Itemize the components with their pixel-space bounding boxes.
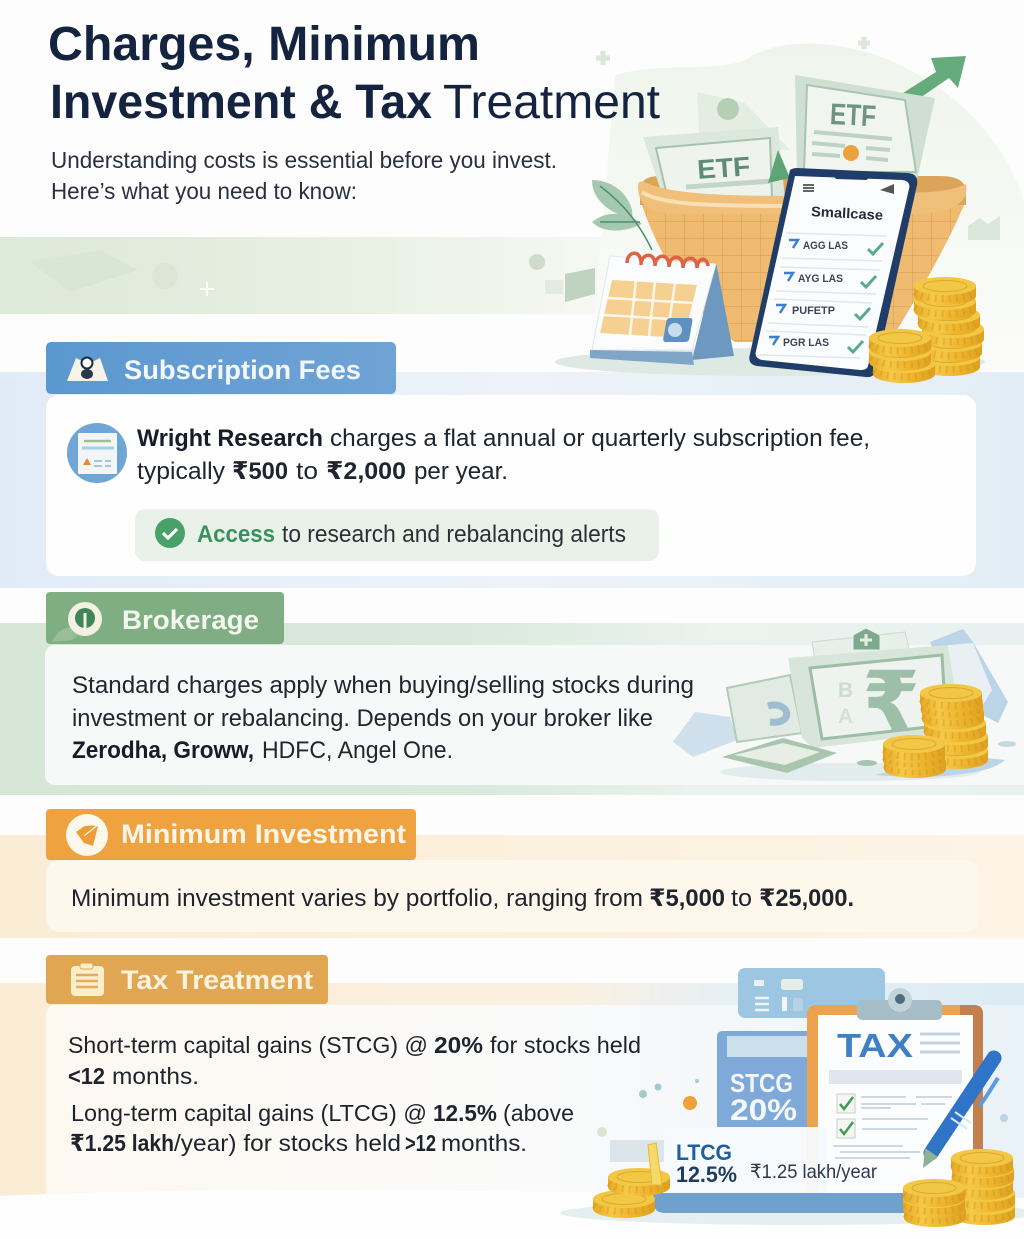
brokerage illustration: cash and coins	[673, 628, 1016, 781]
panel: tax treatment	[0, 1005, 1024, 1239]
text: brokerage description: HDFC, Angel One.	[262, 737, 453, 764]
icon: phone: AYG LAS	[798, 273, 843, 285]
LTCG card: LTCG	[676, 1140, 732, 1165]
callout: access: to research and rebalancing alerts	[282, 521, 626, 548]
icon: hero coin stacks	[869, 277, 984, 383]
band: brokerage section background	[0, 623, 1024, 795]
icon: tax coin stacks	[593, 1143, 1015, 1227]
text: tax description: ₹1.25 lakh	[70, 1130, 174, 1156]
icon: clipboard	[807, 988, 983, 1197]
text: tax description: (above	[503, 1100, 574, 1126]
text: tax description: /year) for stocks held	[174, 1130, 401, 1156]
icon: phone: Smallcase	[811, 203, 884, 223]
text: brokerage description: Zerodha, Groww,	[72, 737, 254, 764]
callout: access	[135, 509, 659, 561]
icon: phone: AGG LAS	[803, 240, 848, 252]
header: subscription fees	[46, 342, 396, 394]
icon: subscription badge	[67, 358, 108, 381]
title: Treatment	[443, 76, 660, 129]
icon: growth arrow	[903, 56, 966, 102]
icon: phone	[749, 168, 917, 377]
text: tax description: 20%	[434, 1032, 483, 1058]
subtitle: Here’s what you need to know:	[51, 178, 357, 204]
title: Charges, Minimum	[48, 18, 480, 71]
subtitle	[51, 147, 557, 204]
header: tax treatment: Tax Treatment	[121, 965, 313, 995]
panel: brokerage	[45, 645, 1024, 785]
icon: calendar	[590, 253, 734, 365]
title: Investment & Tax	[50, 76, 432, 129]
subtitle: Understanding costs is essential before you invest.	[51, 147, 557, 173]
text: subscription description: charges a flat annual or quarterly subscription fee,	[330, 425, 870, 452]
LTCG card: ₹1.25 lakh/year	[750, 1161, 877, 1183]
text: brokerage description: investment or rebalancing. Depends on your broker like	[72, 705, 653, 732]
text: subscription description: to	[296, 458, 318, 485]
brokerage illustration: cash and coins: A	[838, 705, 853, 728]
STCG card: STCG	[730, 1068, 793, 1098]
panel: subscription fees	[46, 395, 976, 576]
text: tax description: months.	[441, 1130, 527, 1156]
icon: document circle	[67, 423, 127, 483]
text: minimum investment description: Minimum investment varies by portfolio, ranging from	[71, 885, 643, 912]
callout: access: Access	[197, 521, 275, 548]
text: tax description	[68, 1032, 641, 1156]
text: subscription description: per year.	[414, 458, 508, 485]
LTCG card: 12.5%	[676, 1162, 737, 1187]
text: tax description: for stocks held	[490, 1032, 641, 1058]
header: brokerage	[46, 592, 284, 644]
LTCG card	[664, 1127, 877, 1195]
text: tax description: >12	[405, 1130, 436, 1156]
STCG card: 20%	[730, 1094, 797, 1127]
band: hero green wash	[0, 37, 1024, 370]
text: tax description: Short-term capital gains (STCG) @	[68, 1032, 428, 1058]
text: tax description: 12.5%	[433, 1100, 497, 1126]
tax illustration: clipboard, cards, pen and coins	[560, 968, 1024, 1227]
basket interior	[640, 176, 966, 205]
small blue card	[738, 968, 885, 1018]
text: subscription description	[137, 425, 870, 485]
icon: phone: PUFETP	[792, 305, 835, 317]
band: minimum investment section background	[0, 835, 1024, 938]
text: brokerage description: Standard charges apply when buying/selling stocks during	[72, 672, 694, 699]
text: minimum investment description: ₹5,000	[649, 885, 725, 912]
ETF certificate back: ETF	[829, 98, 877, 133]
STCG card	[717, 1031, 808, 1128]
header: subscription fees: Subscription Fees	[124, 355, 361, 385]
icon: brokerage badge	[52, 602, 102, 642]
ETF certificate back	[795, 75, 935, 180]
hero illustration: basket, ETFs, phone, calendar and coins	[555, 56, 985, 383]
ground shadow	[555, 348, 985, 376]
text: subscription description: Wright Research	[137, 425, 323, 452]
ETF note front: ETF	[696, 151, 751, 185]
icon: clipboard: TAX	[837, 1027, 913, 1064]
text: minimum investment description: to	[731, 885, 752, 912]
icon: basket	[638, 182, 966, 342]
icon: brokerage coin stacks	[883, 684, 988, 778]
band: tax section background	[0, 983, 1024, 1198]
text: subscription description: typically	[137, 458, 226, 485]
header: minimum investment	[46, 809, 416, 860]
text: tax description: Long-term capital gains (LTCG) @	[71, 1100, 427, 1126]
icon: clipboard badge	[71, 963, 104, 996]
header: tax treatment	[46, 955, 328, 1004]
icon: leaves	[592, 180, 652, 250]
brokerage illustration: cash and coins: B	[838, 679, 853, 702]
ETF note front	[643, 127, 790, 200]
title	[48, 18, 660, 129]
text: tax description: months.	[112, 1063, 199, 1089]
icon: phone: PGR LAS	[783, 337, 829, 349]
header: minimum investment: Minimum Investment	[121, 819, 406, 849]
icon: pen	[923, 1058, 998, 1168]
panel: minimum investment	[46, 860, 978, 932]
text: subscription description: ₹2,000	[326, 458, 406, 485]
icon: minimum investment badge	[66, 814, 108, 856]
text: tax description: <12	[68, 1063, 105, 1089]
band: subscription section background	[0, 372, 1024, 588]
clipboard base	[653, 1193, 910, 1213]
text: subscription description: ₹500	[232, 458, 288, 485]
back leaf note	[697, 92, 790, 150]
header: brokerage: Brokerage	[122, 605, 259, 635]
brokerage illustration: cash and coins: ₹	[862, 655, 920, 749]
text: minimum investment description: ₹25,000.	[759, 885, 854, 912]
text: brokerage description	[72, 672, 694, 764]
